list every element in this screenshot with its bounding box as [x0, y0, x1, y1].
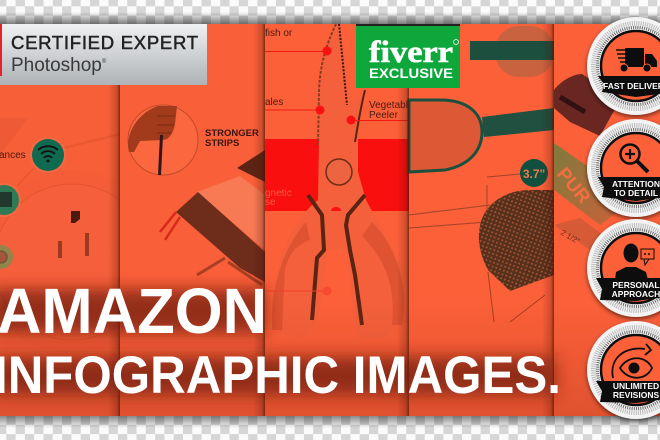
text: scissors labels: Peeler — [369, 110, 399, 121]
text: exclusive: EXCLUSIVE — [369, 65, 453, 81]
icon: calendar — [0, 183, 21, 217]
product: strip pack — [160, 150, 265, 285]
text: magnetic base label: se — [265, 197, 276, 208]
fiverr exclusive badge — [356, 24, 460, 88]
socket slots — [71, 211, 80, 223]
panel: resistance band product — [552, 24, 660, 416]
ribbon — [598, 76, 660, 97]
panel dividers — [108, 24, 120, 416]
text: fiverr logo: fiverr — [369, 34, 453, 69]
heading: amazon infographic images: INFOGRAPHIC IMAGES. — [0, 346, 561, 405]
panel: kitchen scissors — [265, 24, 414, 416]
icon: delivery truck — [616, 48, 657, 72]
icon: person with speech bubble — [615, 244, 654, 280]
panel: strips product — [120, 24, 265, 416]
text: attention to detail: TO DETAIL — [614, 188, 658, 198]
shading behind title in left panels — [0, 300, 409, 416]
icon: magnifier — [620, 144, 648, 172]
text: scissors labels: Vegetable — [369, 100, 414, 111]
text: magnetic base label: gnetic — [265, 188, 292, 199]
certified expert badge — [0, 24, 207, 85]
text: scissors labels: ales — [265, 97, 283, 108]
ribbon — [596, 278, 660, 301]
callout dots and leader lines — [265, 46, 409, 296]
text: scissors labels: fish or — [265, 28, 293, 39]
icon: wifi — [30, 137, 66, 173]
product: mesh brush head — [479, 190, 554, 291]
text: unlimited revisions: REVISIONS — [613, 390, 659, 400]
badge: attention to detail — [587, 119, 660, 217]
text: certified expert: CERTIFIED EXPERT — [11, 32, 198, 53]
text: personal approach: APPROACH — [612, 289, 660, 299]
badge: fast delivery — [587, 17, 660, 115]
scissors illustration — [272, 24, 405, 338]
text: photoshop: ® — [102, 58, 107, 65]
badge: unlimited revisions — [587, 321, 660, 419]
red band — [265, 139, 409, 211]
badge: 3.7 inch dimension — [520, 159, 548, 187]
callout circle: hand pulling strap — [128, 105, 198, 175]
text: photoshop: Photoshop — [11, 55, 102, 76]
ribbon — [598, 177, 660, 201]
title glow — [0, 289, 555, 395]
heading: amazon infographic images: AMAZON — [0, 275, 267, 347]
badge: 3.7 inch dimension: 3.7" — [523, 167, 545, 181]
icon: small status circle — [0, 245, 13, 269]
text: attention to detail: ATTENTION — [612, 179, 660, 189]
text: stronger strips: STRONGER — [205, 128, 259, 139]
text: personal approach: PERSONAL — [612, 280, 660, 290]
text: unlimited revisions: UNLIMITED — [613, 381, 659, 391]
text: 2 1/2 inch dimension: 2 1/2" — [559, 228, 582, 246]
text: stronger strips: STRIPS — [205, 138, 239, 149]
badge: personal approach — [587, 219, 660, 317]
heading: amazon infographic images — [0, 275, 561, 405]
icon: eye with rotation arrow — [612, 344, 652, 378]
panel: resistance band product: PUR — [552, 164, 594, 208]
panel: smart plug — [0, 24, 164, 416]
ribbon — [596, 381, 660, 403]
panel: brush product — [409, 24, 554, 416]
